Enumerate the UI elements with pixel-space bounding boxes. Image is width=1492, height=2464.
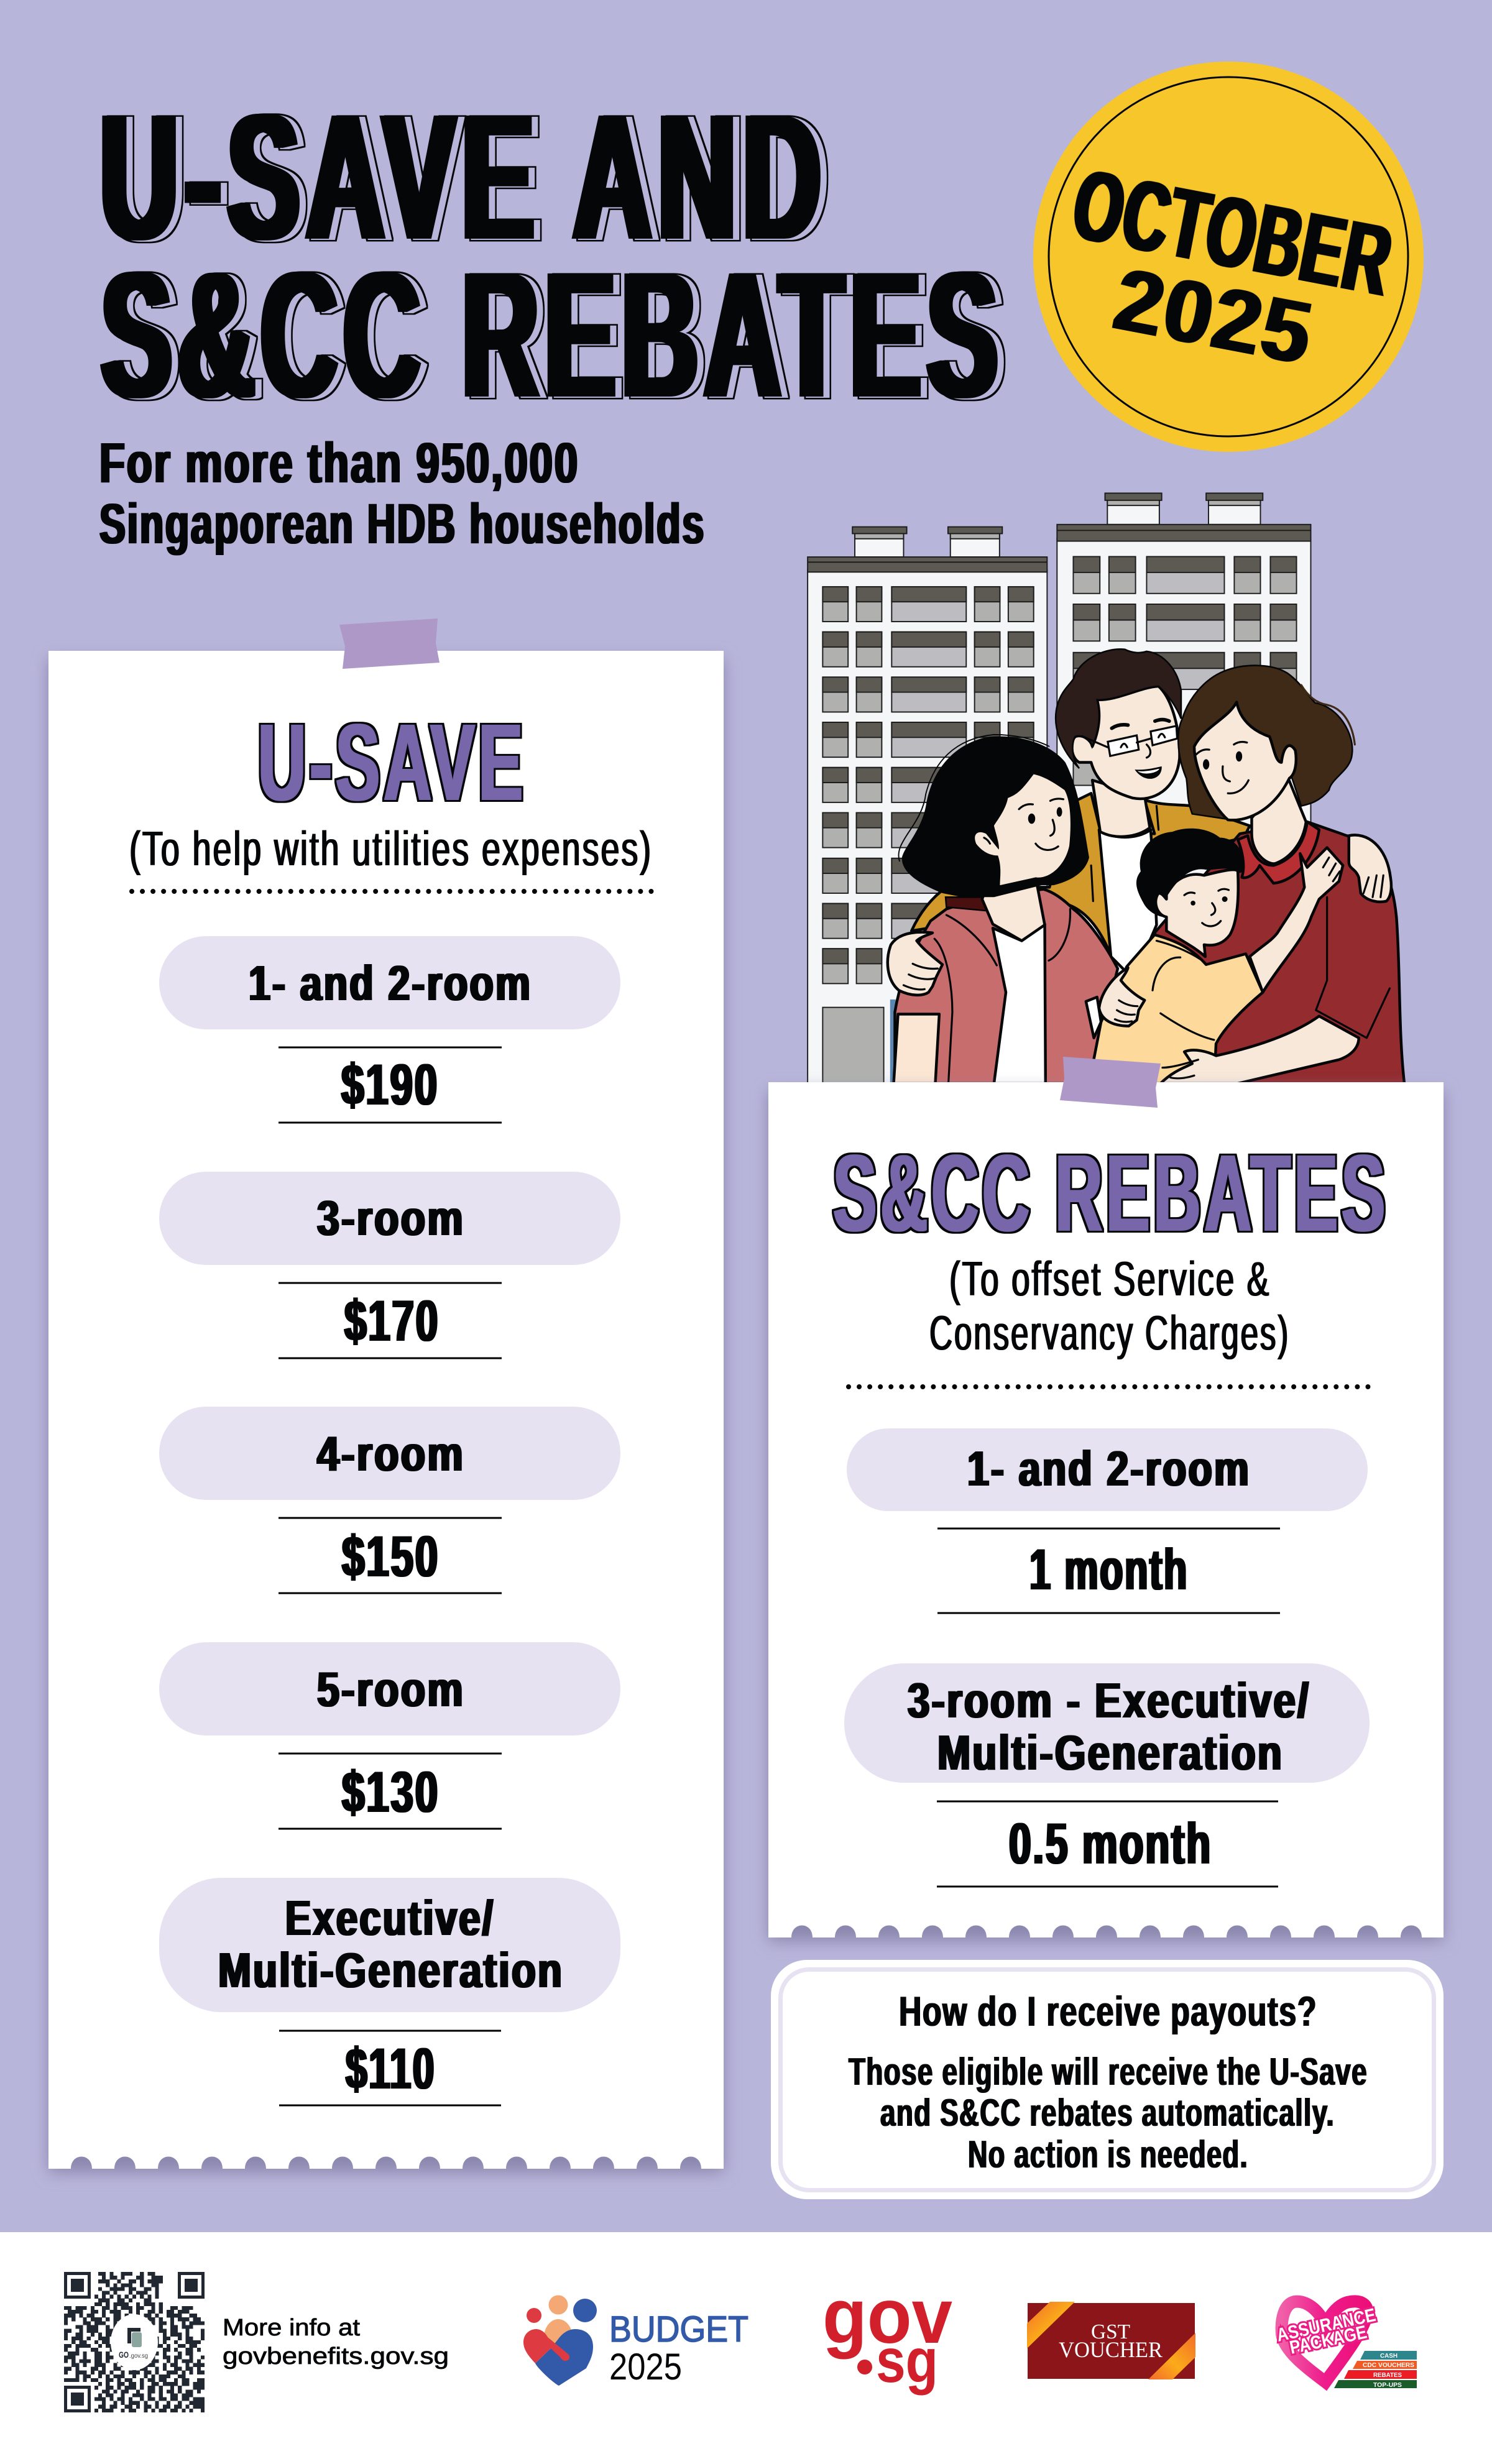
woman [1154, 666, 1404, 1083]
row: 3-room [159, 1172, 620, 1358]
title: U-SAVE AND [100, 77, 827, 277]
badge: October 2025 [1033, 62, 1424, 452]
callout: how do I receive payouts: No action is needed. [968, 2133, 1248, 2176]
hand on woman's shoulder [1349, 835, 1391, 902]
right HDB block [1057, 493, 1311, 1083]
footer [0, 2232, 1492, 2464]
girl [894, 735, 1118, 1083]
man [911, 649, 1250, 970]
logo: Budget 2025: BUDGET [609, 2309, 748, 2350]
sub-heading: S&CC Rebates: (To offset Service & [949, 1251, 1271, 1306]
logo: GST Voucher [1027, 2302, 1195, 2379]
row: Executive / Multi-Generation: Multi-Generation [218, 1942, 564, 1998]
callout: how do I receive payouts [771, 1960, 1444, 2199]
QR code: GO [119, 2350, 129, 2360]
row: 3-room: 3-room [317, 1190, 465, 1246]
hand on boy [1086, 968, 1144, 1038]
hand on girl's shoulder [888, 932, 942, 995]
row: 3-room to Executive / Multi-Generation months [844, 1663, 1370, 1887]
subtitle: Singaporean HDB households [99, 492, 706, 556]
tape: U-Save [339, 618, 440, 669]
row: 4-room [159, 1407, 620, 1593]
row: 1- and 2-room months [847, 1428, 1368, 1613]
row: 3-room to Executive / Multi-Generation months: 3-room - Executive/ [908, 1673, 1310, 1728]
row: Executive / Multi-Generation [159, 1878, 620, 2105]
subtitle: For more than 950,000 [99, 431, 579, 495]
QR code: .gov.sg [129, 2353, 148, 2360]
logo: Assurance Package: REBATES [1373, 2372, 1402, 2379]
logo: gov.sg: sg [876, 2326, 938, 2396]
title [100, 77, 1004, 435]
logo: GST Voucher: VOUCHER [1059, 2337, 1163, 2362]
row: Executive / Multi-Generation: Executive/ [285, 1890, 495, 1946]
row: 1- and 2-room: $190 [341, 1052, 439, 1117]
panel: U-Save [48, 618, 724, 2172]
logo: Assurance Package: CDC VOUCHERS [1363, 2362, 1414, 2369]
row: 3-room to Executive / Multi-Generation months: Multi-Generation [937, 1725, 1284, 1780]
logo: gov.sg: gov [822, 2273, 952, 2360]
logo: Budget 2025 [523, 2295, 748, 2388]
row: 5-room [159, 1642, 620, 1829]
woman's forearm [1161, 1016, 1359, 1083]
sub-heading: S&CC Rebates [929, 1251, 1290, 1360]
row: 1- and 2-room months: 1 month [1029, 1537, 1189, 1602]
logo: Assurance Package: CASH [1380, 2353, 1398, 2360]
row: 1- and 2-room [159, 936, 620, 1123]
logo: Budget 2025: 2025 [609, 2346, 682, 2388]
row: 3-room: $170 [344, 1288, 440, 1353]
row: 1- and 2-room months: 1- and 2-room [967, 1441, 1251, 1496]
subtitle [99, 431, 706, 556]
logo: Assurance Package [1275, 2301, 1417, 2389]
logo: gov.sg [822, 2273, 952, 2396]
QR code [64, 2274, 205, 2411]
panel: S&CC Rebates [768, 1057, 1444, 1941]
logo: Assurance Package: TOP-UPS [1373, 2382, 1402, 2389]
illustration: HDB blocks and family [808, 493, 1404, 1083]
row: 3-room to Executive / Multi-Generation months: 0.5 month [1009, 1811, 1212, 1876]
left HDB block [808, 527, 1047, 1083]
logo: GST Voucher: GST [1091, 2320, 1130, 2343]
heading: U-Save: U-SAVE [258, 702, 527, 824]
row: Executive / Multi-Generation: $110 [346, 2036, 436, 2101]
tape: S&CC [1060, 1057, 1161, 1108]
row: 5-room: 5-room [317, 1662, 465, 1717]
logo: Assurance Package: ASSURANCE [1275, 2305, 1378, 2346]
row: 4-room: $150 [342, 1524, 440, 1589]
badge: October 2025: 2025 [1107, 249, 1321, 384]
row: 1- and 2-room: 1- and 2-room [249, 955, 532, 1011]
boy [1089, 829, 1343, 1083]
logo: Assurance Package: PACKAGE [1288, 2322, 1369, 2358]
row: 4-room: 4-room [317, 1426, 465, 1481]
more info: govbenefits.gov.sg [223, 2343, 449, 2370]
more info [223, 2315, 449, 2370]
sub-heading: S&CC Rebates: Conservancy Charges) [929, 1305, 1290, 1360]
callout: how do I receive payouts: How do I receive payouts? [899, 1988, 1317, 2035]
sub-heading: U-Save: (To help with utilities expenses) [129, 821, 653, 876]
more info: More info at [223, 2315, 360, 2341]
row: 5-room: $130 [342, 1759, 440, 1824]
